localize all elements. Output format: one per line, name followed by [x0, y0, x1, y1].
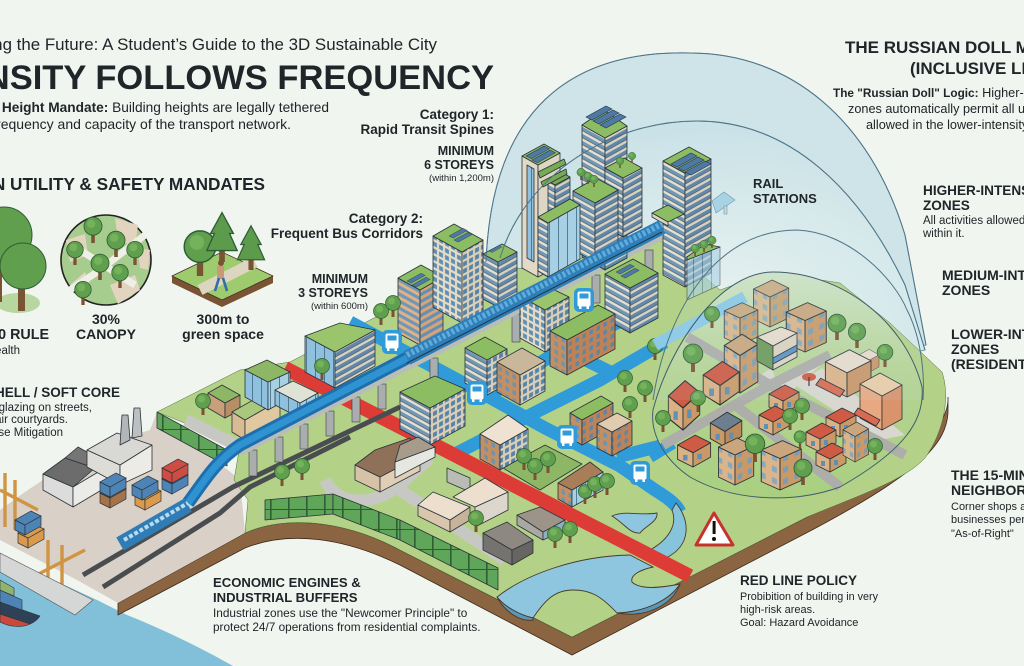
- label: minimum 6 storeys: (within 1,200m): [429, 173, 494, 184]
- rail viaduct pillars and deck: [240, 236, 662, 476]
- tower: orange block: [398, 265, 443, 345]
- heading: russian doll model: [845, 38, 1024, 78]
- grey local roads: [186, 420, 505, 560]
- text: russian doll logic: [833, 86, 1024, 132]
- label: 300m to green space: [182, 311, 264, 342]
- label: 300m to green space: 300m to: [197, 311, 249, 327]
- green buffer fences: [157, 412, 498, 590]
- gabled apartment: [558, 462, 603, 507]
- courtyard block with garden: [480, 415, 582, 490]
- station bridge in the distance: [712, 192, 735, 214]
- label: higher-intensity zones: ZONES: [923, 198, 970, 213]
- tower: left slender with terraces: [522, 144, 580, 277]
- red line hazard strip: [285, 368, 690, 576]
- label: minimum 6 storeys: 6 STOREYS: [424, 158, 494, 172]
- label: 30% canopy: [76, 311, 137, 342]
- height mandate text: [0, 100, 329, 132]
- industrial office campus: [418, 468, 508, 532]
- mid-rise: south stripe: [465, 337, 507, 395]
- icon: 30% canopy: [61, 215, 151, 305]
- label: category 1: Category 1:: [420, 107, 494, 122]
- label: 30% canopy: CANOPY: [76, 326, 137, 342]
- label: medium-intensity zones: [942, 267, 1024, 298]
- small house with green roof: [208, 385, 240, 418]
- mid-rise: cream windows: [520, 285, 569, 352]
- cream townhouse with green roof: [232, 395, 280, 440]
- label: economic engines: ECONOMIC ENGINES &: [213, 575, 361, 590]
- tower: right back block: [605, 158, 642, 237]
- neighbourhood trees: [656, 306, 893, 485]
- dense towers along the rapid transit spine: [355, 110, 720, 565]
- label: red line policy: RED LINE POLICY: [740, 573, 857, 588]
- label: rail stations: STATIONS: [753, 191, 817, 206]
- tower: front green terrace block: [573, 178, 618, 262]
- mid-rise: brick: [550, 305, 615, 375]
- cafe umbrella: [802, 373, 816, 386]
- neighbourhood pavements: [760, 350, 905, 440]
- quay: [0, 553, 93, 615]
- port cranes: [0, 473, 85, 600]
- railway tracks: [83, 407, 400, 587]
- solar roof panels: [407, 106, 711, 287]
- warning triangle: [696, 513, 733, 545]
- label: category 1: [360, 107, 494, 137]
- blue channel inside domes: [650, 297, 745, 457]
- neighbourhood buildings and shops: [668, 280, 902, 490]
- street trees: [196, 152, 716, 548]
- label: medium-intensity zones: ZONES: [942, 282, 990, 298]
- mid-rise: low apartment: [400, 376, 465, 445]
- label: economic engines: Industrial zones use the "Newcomer Principle" to: [213, 606, 468, 620]
- label: economic engines: protect 24/7 operations from residential complaints.: [213, 620, 481, 634]
- warehouse: [43, 447, 110, 507]
- platform side: brown soil rim: [118, 397, 948, 655]
- label: lower-intensity zones: ZONES: [951, 341, 999, 357]
- label: rail stations: RAIL: [753, 176, 783, 191]
- platform: industrial concrete: [0, 412, 245, 603]
- low glass green-roof block: [275, 381, 318, 418]
- label: economic engines: [213, 575, 481, 634]
- glass pavilion: [245, 360, 290, 410]
- text: hard shell soft core: [0, 385, 120, 439]
- label: category 1: Rapid Transit Spines: [360, 122, 494, 137]
- label: minimum 3 storeys: MINIMUM: [312, 272, 368, 286]
- tower: back tall: [582, 110, 627, 270]
- green shop with striped awning: [757, 327, 797, 370]
- label: category 2: [271, 211, 423, 241]
- tower: striped: [483, 244, 517, 307]
- platform: green land: [157, 240, 946, 637]
- label: minimum 3 storeys: (within 600m): [311, 301, 368, 312]
- label: red line policy: high-risk areas.: [740, 604, 815, 616]
- label: higher-intensity zones: [922, 183, 1024, 240]
- label: 300m to green space: green space: [182, 326, 264, 342]
- outer dome: higher-intensity zone: [486, 53, 926, 400]
- glass and stripe office: [305, 323, 375, 388]
- label: minimum 6 storeys: [424, 144, 494, 184]
- label: red line policy: [740, 573, 879, 629]
- icon: green space tile with walker: [172, 213, 273, 307]
- label: category 2: Frequent Bus Corridors: [271, 226, 423, 241]
- tower: cream tall: [433, 224, 483, 323]
- label: higher-intensity zones: All activities allowed: [923, 215, 1024, 227]
- blue bus corridors: [350, 312, 680, 512]
- rail ramp and elevated train: [120, 224, 662, 544]
- label: minimum 6 storeys: MINIMUM: [438, 144, 494, 158]
- shipping containers: [15, 459, 188, 548]
- tower: right tallest stripe: [652, 147, 720, 300]
- lower neighbourhood block: [570, 396, 632, 456]
- factory and chimneys: [87, 408, 152, 485]
- river and reservoir: [497, 503, 686, 620]
- label: minimum 3 storeys: [298, 272, 368, 312]
- label: 3-30-300 rule: [0, 327, 49, 357]
- second dome: transit envelope: [500, 121, 925, 400]
- lower-left neighbourhood buildings: [208, 323, 375, 440]
- label: lower-intensity zones: [951, 326, 1024, 372]
- neighbourhood streets: [663, 337, 905, 487]
- label: economic engines: INDUSTRIAL BUFFERS: [213, 590, 358, 605]
- water: [0, 555, 233, 666]
- inner neighbourhood ground: [653, 272, 922, 498]
- bus stop icons: [382, 288, 650, 485]
- grey flat sheds: [483, 507, 565, 565]
- mid-rise: round striped: [605, 259, 658, 333]
- label: 30% canopy: 30%: [92, 311, 121, 327]
- label: 15-minute neighborhood: [951, 467, 1024, 540]
- label: red line policy: Goal: Hazard Avoidance: [740, 617, 858, 629]
- barn sheds: [355, 437, 435, 492]
- dome overlays: [486, 53, 926, 498]
- icon: 3-30-300 trees: [0, 207, 46, 313]
- label: minimum 3 storeys: 3 STOREYS: [298, 286, 368, 300]
- label: red line policy: Probibition of building in very: [740, 591, 879, 603]
- cargo ship: [0, 580, 40, 626]
- label: higher-intensity zones: within it.: [922, 228, 965, 240]
- mid-rise: small brick: [497, 348, 545, 405]
- label: 15-minute neighborhood: "As-of-Right": [951, 528, 1014, 540]
- label: category 2: Category 2:: [349, 211, 423, 226]
- label: rail stations: [753, 176, 817, 206]
